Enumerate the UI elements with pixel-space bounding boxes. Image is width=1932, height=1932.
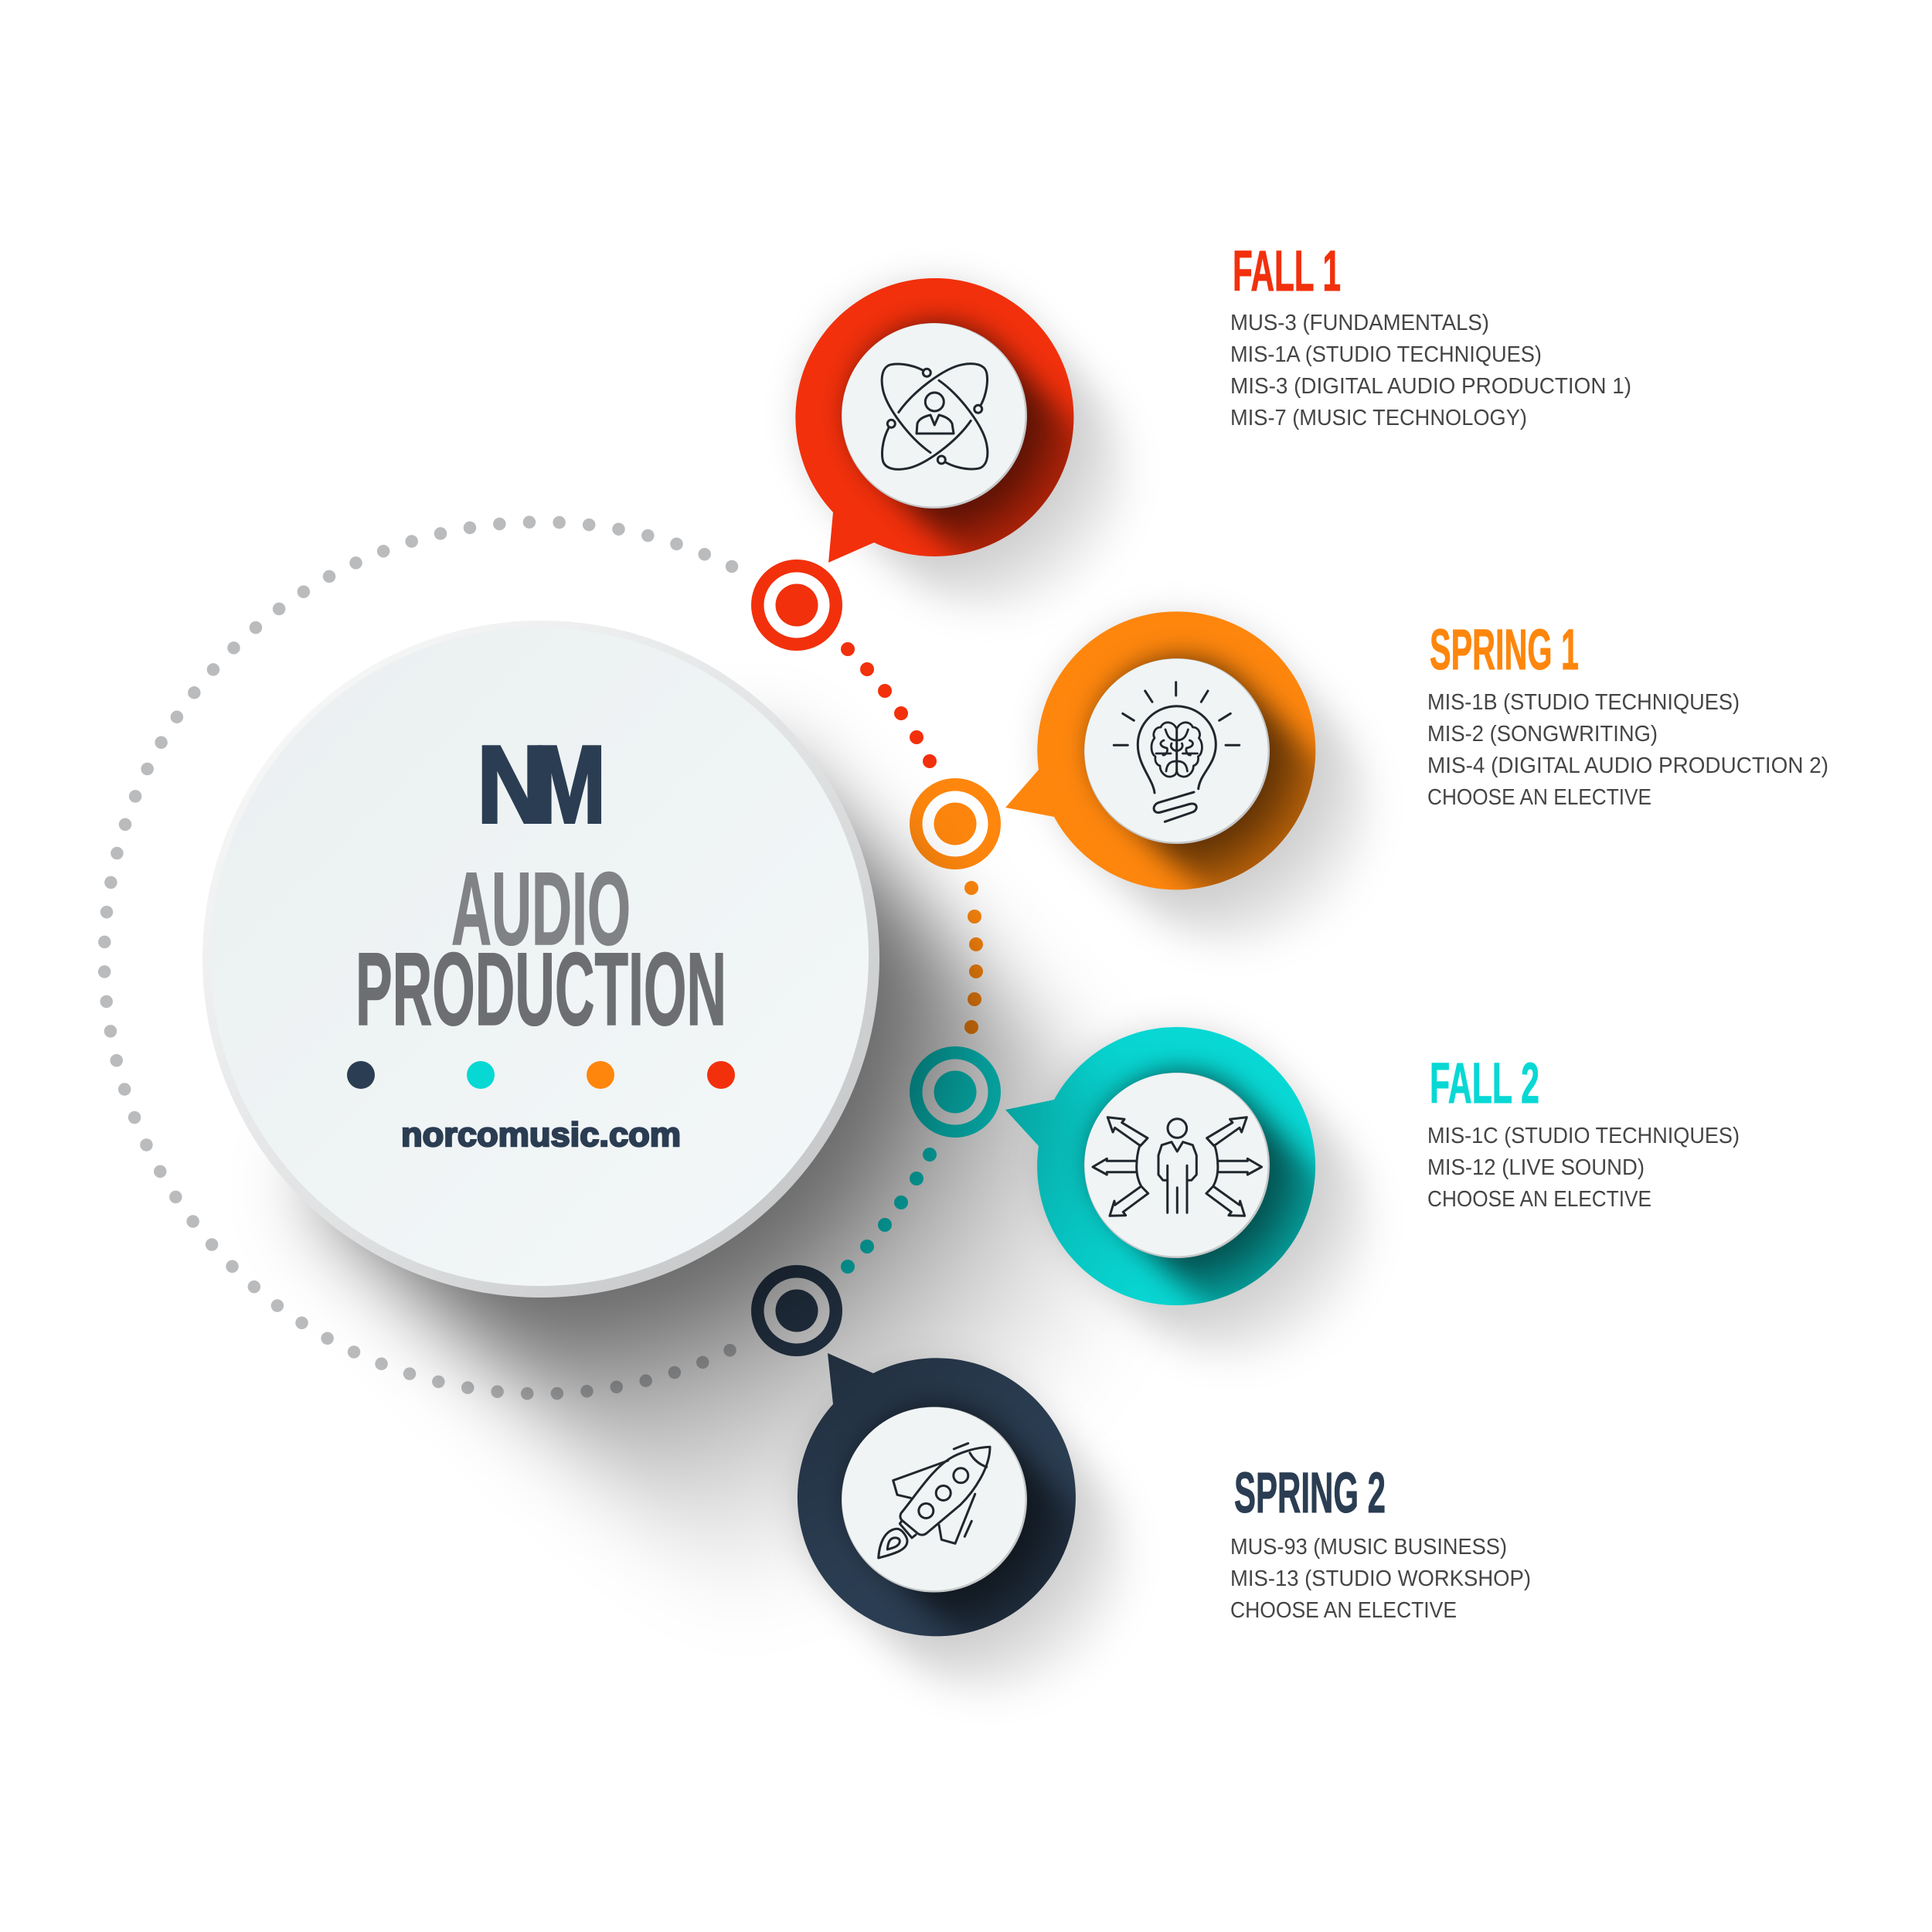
teal connector dots [841, 1148, 937, 1274]
badge: spring 2 [842, 1406, 1031, 1592]
long shadow of main disc [533, 966, 1151, 1584]
target ring: red [757, 566, 836, 645]
text block: spring 1: MIS-1B (STUDIO TECHNIQUES) [1427, 690, 1740, 715]
gray dotted orbit [104, 522, 732, 1394]
target ring: teal [916, 1053, 995, 1131]
text block: fall 1: MIS-1A (STUDIO TECHNIQUES) [1230, 342, 1542, 367]
text block: fall 2: MIS-1C (STUDIO TECHNIQUES) [1427, 1124, 1740, 1148]
text block: spring 2: MUS-93 (MUSIC BUSINESS) [1230, 1535, 1507, 1560]
logo: NM: M [533, 723, 606, 846]
text block: fall 2: FALL 2 [1430, 1051, 1539, 1115]
target ring: navy [757, 1271, 836, 1350]
text block: spring 2: MIS-13 (STUDIO WORKSHOP) [1230, 1566, 1531, 1591]
text block: spring 2: SPRING 2 [1234, 1461, 1386, 1525]
badge: fall 1 [842, 323, 1031, 509]
heading: audio: AUDIO [451, 852, 631, 967]
text block: fall 2 [1427, 1051, 1740, 1212]
main disc [202, 621, 879, 1298]
colour legend dots [347, 1061, 735, 1089]
target ring: orange [916, 784, 995, 863]
speech bubble: fall 1 [795, 278, 1073, 563]
heading: production: PRODUCTION [355, 932, 726, 1047]
text block: spring 1: CHOOSE AN ELECTIVE [1427, 785, 1651, 810]
text block: spring 2 [1230, 1461, 1531, 1623]
speech bubble: spring 1 [1005, 611, 1315, 889]
text block: spring 1 [1427, 617, 1828, 810]
text block: fall 1: MUS-3 (FUNDAMENTALS) [1230, 311, 1489, 335]
text block: spring 2: CHOOSE AN ELECTIVE [1230, 1598, 1457, 1623]
logo: NM: N [477, 723, 548, 846]
icon: atom with person [882, 364, 988, 469]
red connector dots [841, 642, 937, 768]
text block: fall 2: CHOOSE AN ELECTIVE [1427, 1187, 1651, 1212]
speech bubble: fall 2 [1005, 1027, 1315, 1305]
text block: fall 1: MIS-7 (MUSIC TECHNOLOGY) [1230, 406, 1527, 430]
icon: person with arrows [1093, 1117, 1262, 1216]
badge: fall 2 [1084, 1073, 1274, 1258]
text block: fall 1: MIS-3 (DIGITAL AUDIO PRODUCTION 1) [1230, 374, 1631, 399]
icon: light bulb with brain [1114, 682, 1240, 821]
speech bubble: spring 2 [798, 1353, 1076, 1636]
text block: spring 1: SPRING 1 [1430, 617, 1579, 682]
text block: spring 1: MIS-4 (DIGITAL AUDIO PRODUCTION 2) [1427, 753, 1828, 778]
text block: spring 1: MIS-2 (SONGWRITING) [1427, 722, 1658, 747]
logo: NM [477, 723, 606, 846]
text block: fall 1 [1230, 239, 1631, 430]
orange connector dots [964, 881, 983, 1034]
text block: fall 2: MIS-12 (LIVE SOUND) [1427, 1155, 1645, 1180]
website: norcomusic.com [401, 1116, 681, 1154]
badge: spring 1 [1084, 658, 1274, 844]
icon: rocket [879, 1444, 990, 1558]
text block: fall 1: FALL 1 [1233, 239, 1341, 303]
